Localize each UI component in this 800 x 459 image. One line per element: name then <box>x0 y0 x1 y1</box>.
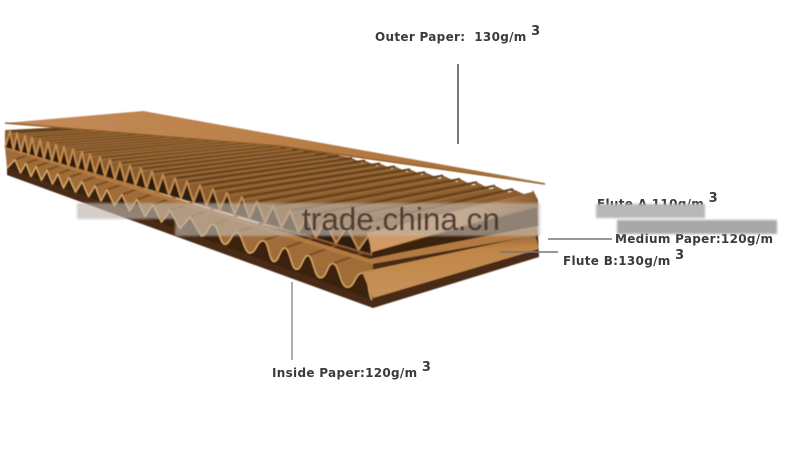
label: outer paper: Outer Paper: 130g/m <box>375 30 527 44</box>
flute B surface <box>5 147 373 300</box>
label: flute B: 3 <box>675 248 684 263</box>
leader line: flute B <box>500 251 558 253</box>
watermark text: trade.china.cn <box>302 201 500 237</box>
illustration: corrugated board <box>5 111 545 308</box>
medium paper <box>5 145 538 264</box>
flute B end panel <box>362 235 539 298</box>
label: flute A: Flute A 110g/m <box>597 197 704 211</box>
shadow below flute A panel <box>372 207 538 258</box>
leader line: outer paper <box>457 64 459 144</box>
label: inside paper: 3 <box>422 360 431 375</box>
bottom liner <box>7 160 539 308</box>
flute B wave edge <box>7 160 372 300</box>
label: flute B: Flute B:130g/m <box>563 254 671 268</box>
flute A layer <box>5 122 538 258</box>
watermark band <box>77 203 777 236</box>
outer paper sheet <box>5 111 545 183</box>
label: outer paper: 3 <box>531 24 540 39</box>
flute B layer <box>5 146 539 308</box>
flute A ridges <box>10 122 533 233</box>
outer paper lower edge <box>5 123 545 184</box>
leader line: inside paper <box>291 282 293 360</box>
label: medium paper: Medium Paper:120g/m <box>615 232 773 246</box>
leader line: medium paper <box>548 238 612 240</box>
flute A surface <box>5 122 538 256</box>
flute A end panel <box>367 192 538 252</box>
label: inside paper: Inside Paper:120g/m <box>272 366 417 380</box>
label: flute A: 3 <box>709 191 718 206</box>
flute A wave edge <box>5 131 372 254</box>
